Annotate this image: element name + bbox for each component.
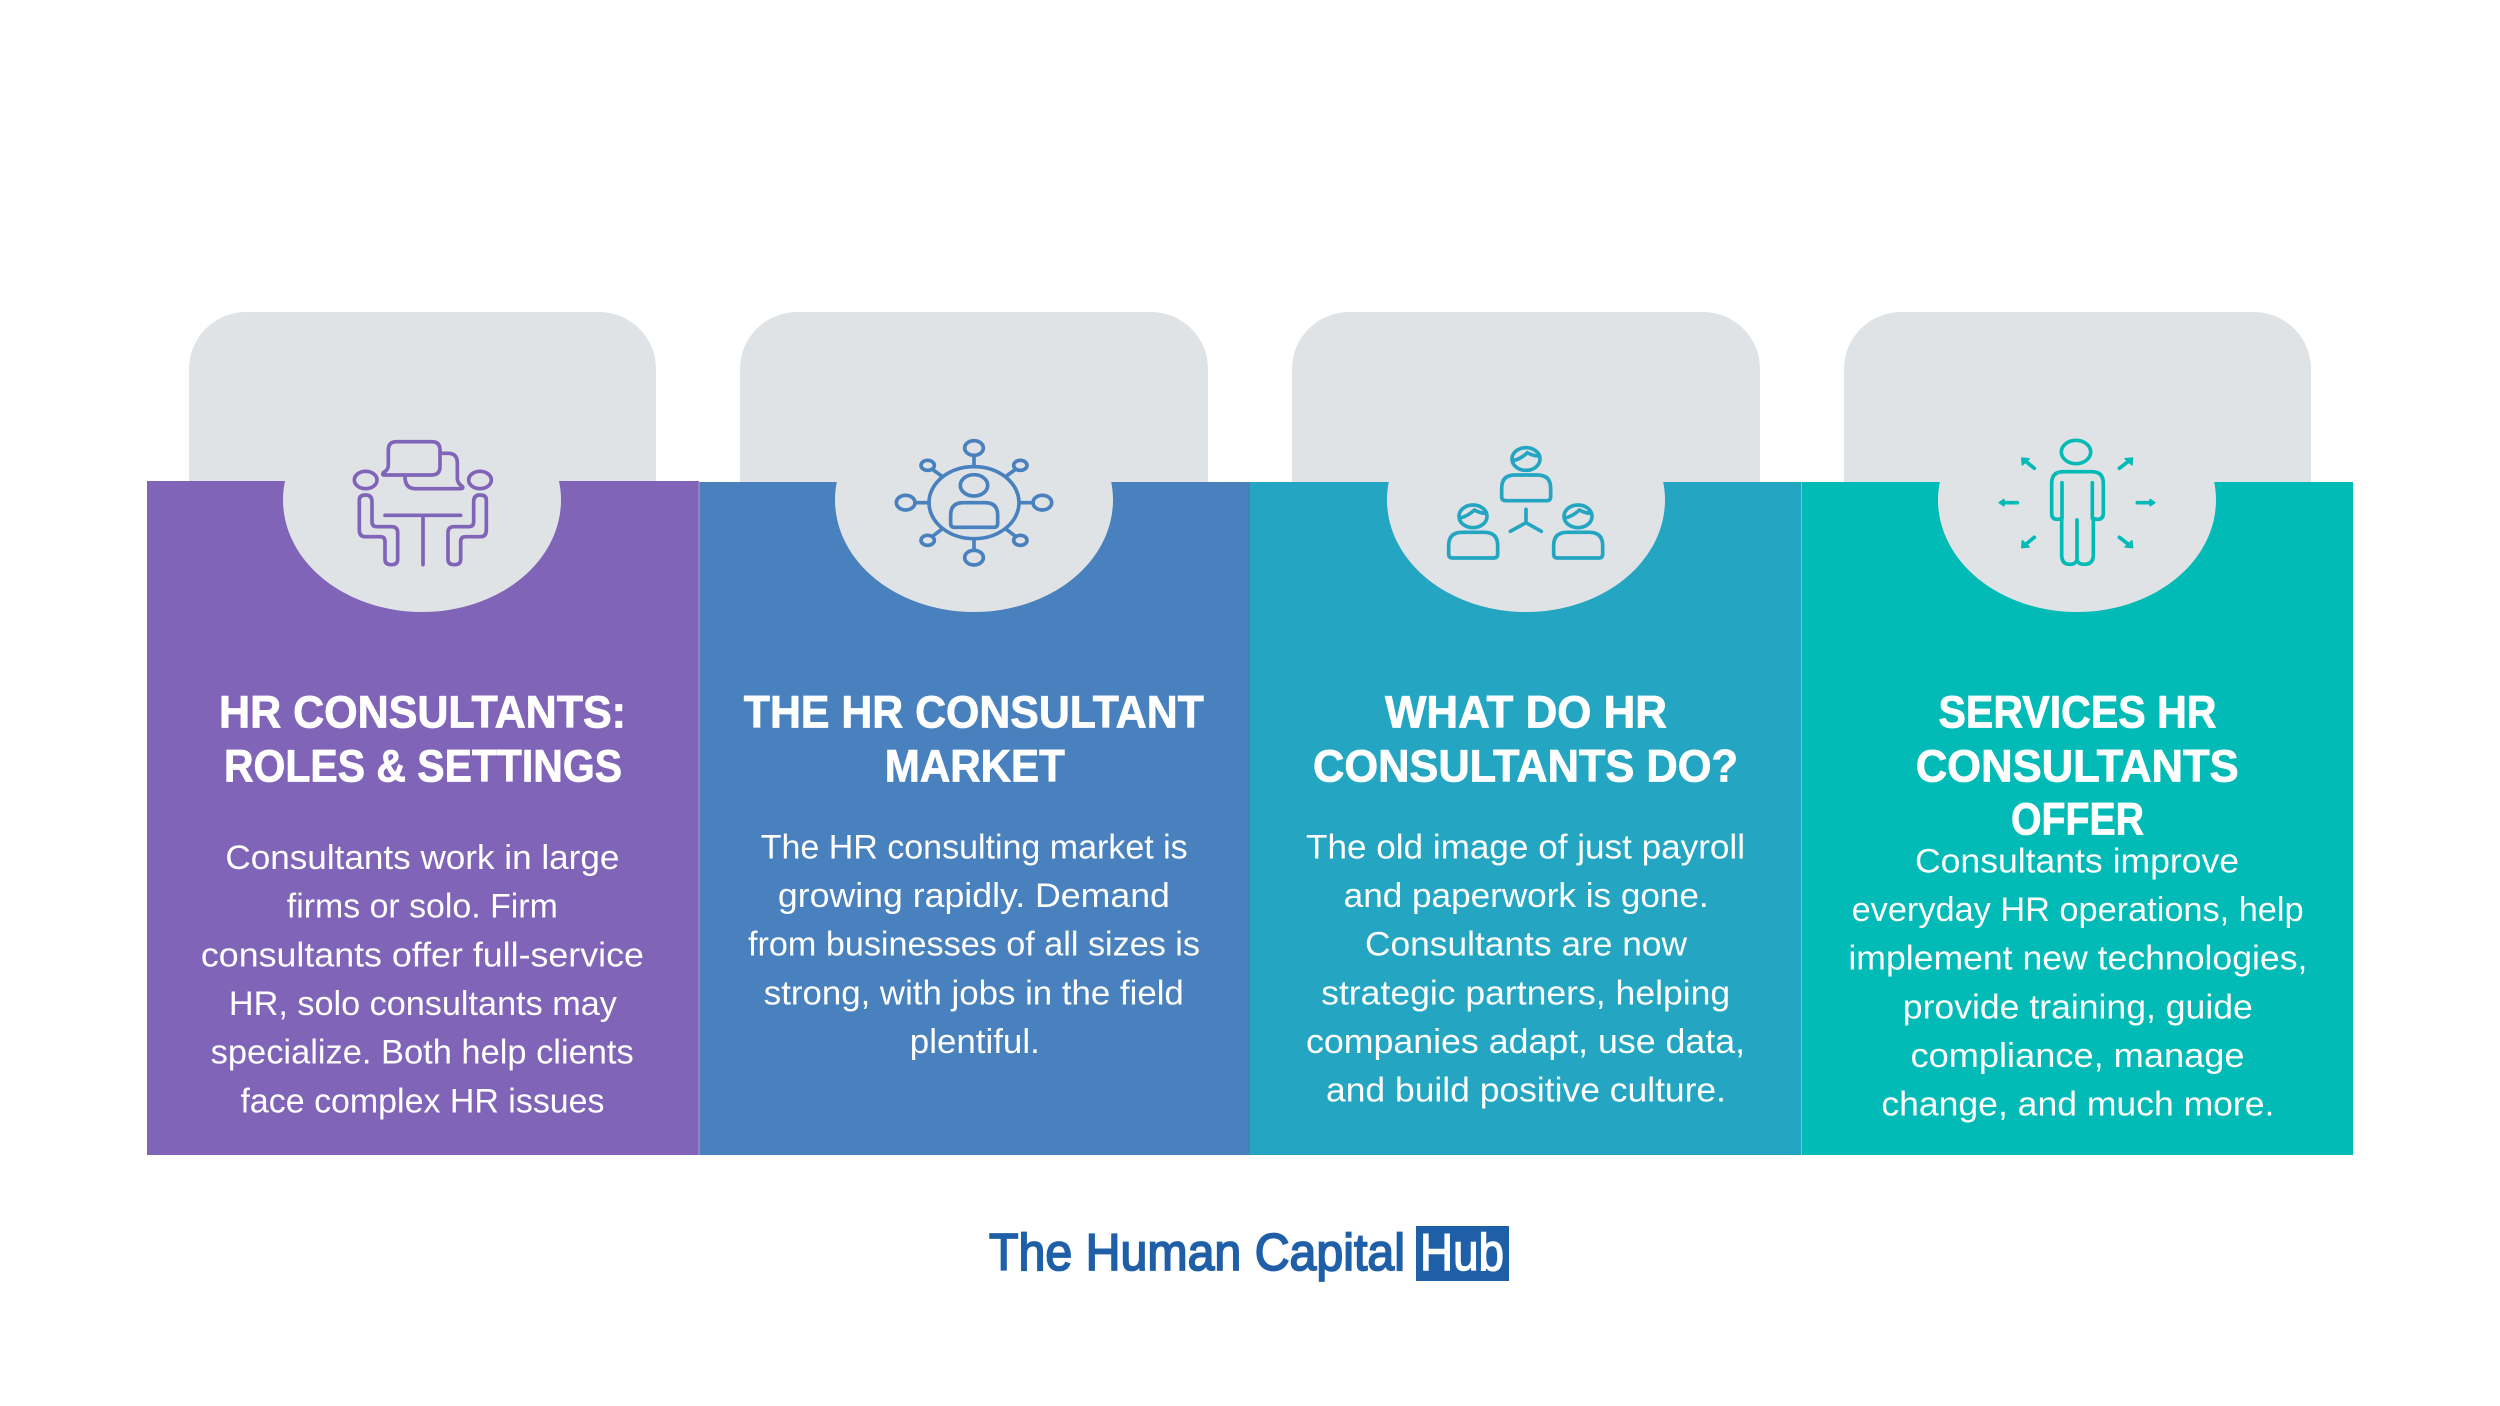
heading: CONSULTANTS DO? (1313, 740, 1738, 792)
body text: The old image of just payroll (1306, 828, 1745, 866)
body text: growing rapidly. Demand (778, 877, 1170, 915)
heading: WHAT DO HR (1385, 686, 1667, 738)
teal card (1801, 482, 2353, 1155)
body text: specialize. Both help clients (211, 1034, 634, 1072)
body text: plentiful. (910, 1023, 1040, 1061)
heading (1916, 686, 2239, 844)
body text: Consultants work in large (225, 839, 619, 877)
body text (1848, 842, 2307, 1124)
body text: Consultants improve (1915, 842, 2239, 880)
heading: THE HR CONSULTANT (744, 686, 1204, 738)
body text (1306, 828, 1745, 1110)
heading: SERVICES HR (1938, 686, 2216, 738)
heading (1313, 686, 1738, 792)
body text: The HR consulting market is (761, 828, 1188, 866)
heading (744, 686, 1204, 792)
body text: implement new technologies, (1848, 940, 2307, 978)
logo: The Human Capital Hub (989, 1224, 1509, 1282)
body text: everyday HR operations, help (1852, 891, 2304, 929)
panel: HR consultants roles and settings (147, 312, 699, 1155)
grey tab (1844, 312, 2311, 490)
body text (748, 828, 1200, 1061)
purple card (147, 481, 699, 1155)
panel: the HR consultant market (699, 312, 1250, 1155)
icon: person with outward arrows (1999, 440, 2155, 564)
icon: two people talking at a table (354, 442, 491, 565)
notch (1938, 388, 2216, 612)
body text: companies adapt, use data, (1306, 1023, 1745, 1061)
grey tab (1292, 312, 1760, 490)
icon: three people hierarchy (1449, 448, 1603, 558)
logo badge (1416, 1226, 1509, 1281)
body text (201, 839, 644, 1120)
heading: ROLES & SETTINGS (224, 740, 622, 792)
body text: Consultants are now (1365, 926, 1687, 964)
body text: consultants offer full-service (201, 936, 644, 974)
heading (219, 686, 626, 792)
logo badge text: Hub (1420, 1224, 1504, 1282)
body text: and build positive culture. (1326, 1072, 1726, 1110)
grey tab (189, 312, 656, 490)
notch (835, 388, 1113, 612)
body text: face complex HR issues (240, 1082, 604, 1120)
icon: person network (896, 441, 1052, 565)
panel: what do HR consultants do (1250, 312, 1801, 1155)
body text: and paperwork is gone. (1344, 877, 1709, 915)
grey tab (740, 312, 1208, 490)
blue card (699, 482, 1250, 1155)
heading: CONSULTANTS (1916, 740, 2239, 792)
body text: firms or solo. Firm (287, 888, 558, 926)
body text: HR, solo consultants may (229, 985, 617, 1023)
heading: MARKET (885, 740, 1065, 792)
panel: services HR consultants offer (1801, 312, 2353, 1155)
body text: compliance, manage (1910, 1037, 2244, 1075)
body text: from businesses of all sizes is (748, 926, 1200, 964)
cyan card (1250, 482, 1801, 1155)
body text: strategic partners, helping (1321, 974, 1730, 1012)
body text: change, and much more. (1881, 1086, 2274, 1124)
heading: OFFER (2011, 794, 2144, 844)
logo wordmark: The Human Capital (989, 1224, 1405, 1282)
notch (1387, 388, 1665, 612)
body text: provide training, guide (1903, 988, 2253, 1026)
body text: strong, with jobs in the field (764, 974, 1184, 1012)
heading: HR CONSULTANTS: (219, 686, 626, 738)
notch (283, 388, 561, 612)
